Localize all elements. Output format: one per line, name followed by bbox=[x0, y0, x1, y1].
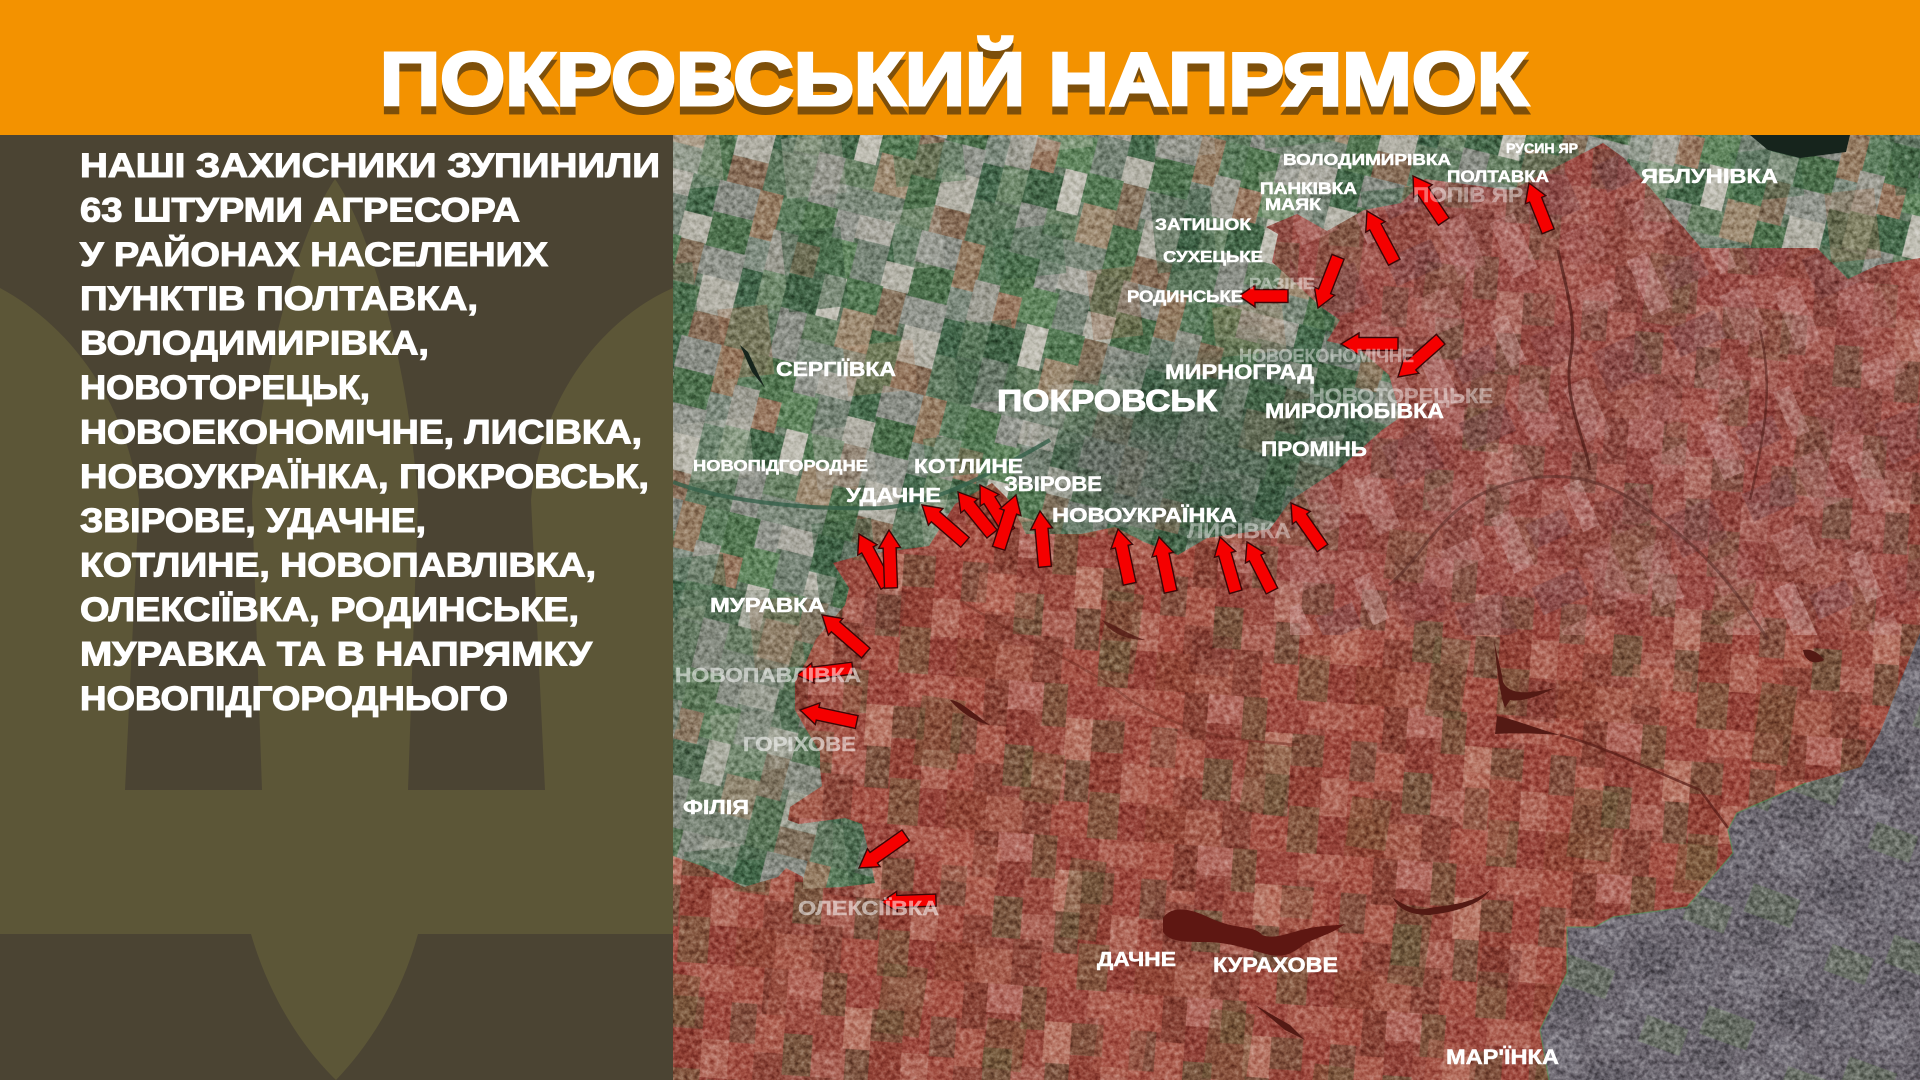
header bar bbox=[0, 0, 1920, 135]
text block: report: МУРАВКА ТА В НАПРЯМКУ bbox=[80, 635, 593, 673]
label: settlements: ПРОМІНЬ bbox=[1261, 438, 1367, 461]
label: settlements: МИРНОГРАД bbox=[1165, 361, 1314, 384]
label: settlements: ПОКРОВСЬК bbox=[997, 383, 1217, 418]
arrows group bbox=[796, 170, 1558, 912]
text block: report: НОВОУКРАЇНКА, ПОКРОВСЬК, bbox=[80, 458, 649, 496]
text block: report: ВОЛОДИМИРІВКА, bbox=[80, 325, 429, 363]
text block: report: 63 ШТУРМИ АГРЕСОРА bbox=[80, 191, 520, 229]
arrow: Муравка bbox=[821, 614, 871, 659]
label: faded settlements: ПОПІВ ЯР bbox=[1413, 184, 1523, 207]
label: settlements: НОВОУКРАЇНКА bbox=[1052, 504, 1237, 527]
label: settlements: ЯБЛУНІВКА bbox=[1641, 166, 1778, 188]
label: settlements: МАЯК bbox=[1265, 195, 1322, 214]
label: settlements: РУСИН ЯР bbox=[1506, 140, 1578, 156]
label: settlements: РОДИНСЬКЕ bbox=[1127, 287, 1243, 306]
label: settlements: ПОЛТАВКА bbox=[1447, 167, 1549, 186]
arrow: Промінь bbox=[1290, 502, 1329, 553]
arrow: Разіне bbox=[1314, 254, 1345, 310]
arrow: Лисівка 2 bbox=[1214, 536, 1243, 594]
arrow: Володимирівка bbox=[1412, 174, 1450, 226]
water: rivers and ponds bbox=[740, 135, 1850, 1040]
label: settlements: ЗАТИШОК bbox=[1155, 215, 1252, 234]
label: faded settlements: НОВОЕКОНОМІЧНЕ bbox=[1239, 346, 1414, 366]
arrow: Удачне 1 bbox=[857, 533, 884, 590]
label: faded settlements: НОВОПАВЛІВКА bbox=[675, 665, 861, 687]
label: settlements: СЕРГІЇВКА bbox=[776, 358, 896, 381]
label: settlements: ФІЛІЯ bbox=[683, 797, 749, 819]
arrow: Олексіївка 1 bbox=[858, 829, 910, 869]
arrow: Котлине 1 bbox=[957, 491, 998, 539]
arrow: Новоукраїнка 1 bbox=[1151, 536, 1178, 594]
arrow: Новопавлівка 2 bbox=[798, 702, 859, 730]
arrow: Новоукраїнка 2 bbox=[1110, 528, 1137, 586]
text block: report: ЗВІРОВЕ, УДАЧНЕ, bbox=[80, 502, 426, 540]
label: settlements: МИРОЛЮБІВКА bbox=[1265, 400, 1444, 423]
label: settlements: СУХЕЦЬКЕ bbox=[1163, 249, 1263, 266]
text block: report: НОВОПІДГОРОДНЬОГО bbox=[80, 680, 508, 718]
arrow: Звірове 1 bbox=[1029, 510, 1056, 568]
farmland base bbox=[673, 135, 1920, 1080]
arrow: Новопавлівка 1 bbox=[796, 662, 854, 684]
label: settlements: МУРАВКА bbox=[710, 595, 825, 617]
arrow: Новоекономічне bbox=[1341, 333, 1398, 355]
arrow: Котлине 2 bbox=[921, 504, 970, 548]
label: settlements bbox=[683, 140, 1778, 1069]
text block: report: У РАЙОНАХ НАСЕЛЕНИХ bbox=[80, 235, 548, 274]
label: settlements: ВОЛОДИМИРІВКА bbox=[1283, 152, 1452, 169]
arrow: Новоторецьке bbox=[1397, 334, 1446, 378]
map labels bbox=[675, 140, 1778, 1069]
text block: report: КОТЛИНЕ, НОВОПАВЛІВКА, bbox=[80, 547, 596, 585]
label: faded settlements bbox=[675, 184, 1523, 920]
arrow: Удачне 2 bbox=[878, 530, 902, 588]
label: settlements: КОТЛИНЕ bbox=[914, 456, 1023, 478]
label: faded settlements: НОВОТОРЕЦЬКЕ bbox=[1309, 385, 1493, 408]
text block: report: ПУНКТІВ ПОЛТАВКА, bbox=[80, 280, 478, 318]
road and gullies bbox=[673, 250, 1768, 828]
label: faded settlements: РАЗІНЕ bbox=[1249, 276, 1315, 293]
text block: report: НАШІ ЗАХИСНИКИ ЗУПИНИЛИ bbox=[80, 147, 660, 185]
arrow: Лисівка 1 bbox=[1244, 540, 1279, 595]
label: faded settlements: ГОРІХОВЕ bbox=[743, 734, 856, 756]
arrow: Родинське bbox=[1239, 285, 1288, 307]
label: settlements: НОВОПІДГОРОДНЕ bbox=[693, 458, 868, 475]
arrow: Звірове 2 bbox=[979, 484, 1016, 530]
label: faded settlements: ЛИСІВКА bbox=[1187, 520, 1291, 543]
occupied territory bbox=[673, 135, 1920, 1080]
contact line green edge bbox=[1540, 783, 1806, 1080]
text block: report: НОВОЕКОНОМІЧНЕ, ЛИСІВКА, bbox=[80, 413, 642, 451]
panel: satellite map bbox=[673, 135, 1920, 1080]
label: settlements: УДАЧНЕ bbox=[846, 485, 941, 507]
icon: trident emblem bbox=[0, 179, 673, 1080]
label: faded settlements: ОЛЕКСІЇВКА bbox=[798, 897, 939, 920]
text block: report: ОЛЕКСІЇВКА, РОДИНСЬКЕ, bbox=[80, 591, 579, 629]
arrow: Панківка bbox=[1365, 210, 1401, 266]
left panel: trident background bbox=[0, 135, 673, 1080]
text block: report: НОВОТОРЕЦЬК, bbox=[80, 369, 370, 407]
label: settlements: ПАНКІВКА bbox=[1260, 179, 1357, 198]
label: settlements: КУРАХОВЕ bbox=[1213, 954, 1338, 977]
label: settlements: ДАЧНЕ bbox=[1097, 949, 1176, 971]
city area: grey zone bbox=[1540, 634, 1920, 1080]
water: Kurakhove reservoir bbox=[1163, 909, 1345, 956]
label: settlements: ЗВІРОВЕ bbox=[1004, 473, 1102, 496]
title: ПОКРОВСЬКИЙ НАПРЯМОК bbox=[380, 37, 1528, 121]
arrow: Звірове 3 bbox=[992, 494, 1022, 551]
text block: report bbox=[80, 147, 660, 718]
label: settlements: МАР'ЇНКА bbox=[1446, 1046, 1559, 1069]
arrow: Олексіївка 2 bbox=[881, 890, 936, 912]
arrow: Полтавка bbox=[1524, 182, 1555, 234]
